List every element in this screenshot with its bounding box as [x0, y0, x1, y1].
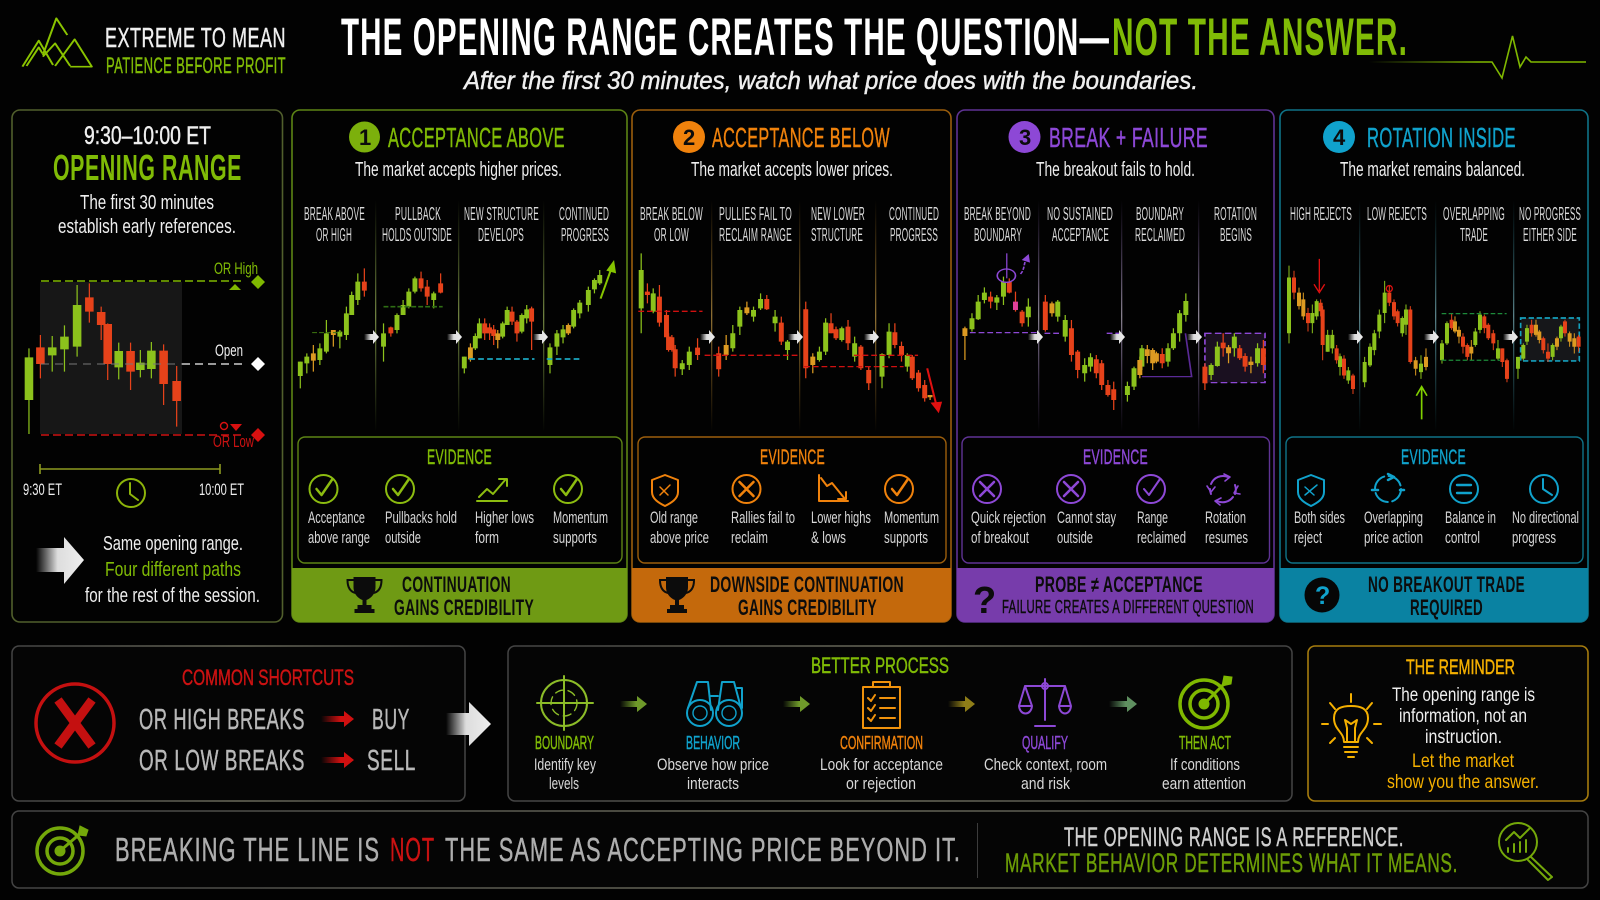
shortcuts heading: COMMON SHORTCUTS: [182, 665, 354, 690]
step: then act: earn attention: [1162, 774, 1246, 793]
step labels: RECLAIMED: [1135, 225, 1185, 245]
icon: falling chart: [819, 475, 848, 501]
process heading: BETTER PROCESS: [811, 653, 949, 678]
step labels: BOUNDARY: [974, 225, 1022, 245]
evidence text: [308, 508, 608, 547]
evidence text: Range: [1137, 508, 1168, 527]
arrow: [948, 696, 975, 712]
banner text: GAINS CREDIBILITY: [394, 595, 534, 620]
arrows between steps: [364, 330, 548, 344]
banner: continuation: [292, 568, 627, 622]
panel: acceptance above: CONTINUED: [559, 204, 609, 224]
step labels: LOW REJECTS: [1367, 204, 1427, 224]
subtitle: After the first 30 minutes, watch what price does with the boundaries.: [462, 67, 1198, 95]
heading: ACCEPTANCE ABOVE: [388, 122, 565, 153]
step: boundary: levels: [549, 774, 579, 793]
panel: opening range: [12, 110, 282, 622]
evidence text: supports: [553, 528, 597, 547]
step labels: BOUNDARY: [1136, 204, 1184, 224]
evidence box: [298, 437, 622, 563]
chart: rotation inside: [1289, 259, 1579, 419]
banner text: GAINS CREDIBILITY: [738, 595, 877, 620]
step: then act: [1162, 676, 1246, 793]
evidence text: Acceptance: [308, 508, 365, 527]
step: then act: THEN ACT: [1179, 733, 1231, 753]
opening range heading: OPENING RANGE: [53, 147, 242, 188]
brand name: EXTREME TO MEAN: [105, 22, 286, 53]
heading: BREAK + FAILURE: [1049, 122, 1208, 153]
evidence text: Pullbacks hold: [385, 508, 457, 527]
reminder text: information, not an: [1399, 706, 1527, 727]
step labels: NEW STRUCTURE: [464, 204, 539, 224]
step labels: BEGINS: [1220, 225, 1252, 245]
evidence text: Quick rejection: [971, 508, 1046, 527]
icon: check: [554, 475, 582, 503]
or high marker: [214, 259, 265, 290]
time axis: [40, 464, 220, 474]
icon: target: [37, 826, 88, 874]
step labels: HOLDS OUTSIDE: [382, 225, 452, 245]
logo: mountains: [22, 18, 92, 67]
evidence text: of breakout: [971, 528, 1029, 547]
arrows between steps: [1028, 330, 1202, 344]
banner text: [1002, 572, 1254, 617]
step labels: BREAK BEYOND: [964, 204, 1031, 224]
panel: acceptance above: [292, 110, 627, 622]
time labels: [23, 480, 244, 499]
banner: no breakout trade: [1280, 568, 1588, 622]
step labels: BREAK ABOVE: [304, 204, 365, 224]
open marker: [215, 341, 265, 371]
paths note: Four different paths: [105, 559, 241, 581]
step: confirmation: [820, 682, 943, 793]
time labels: 10:00 ET: [199, 480, 244, 499]
brand name: PATIENCE BEFORE PROFIT: [106, 53, 286, 78]
icon: heartbeat line: [1369, 36, 1586, 78]
step: boundary: Identify key: [534, 755, 596, 774]
number badge 4: [1323, 121, 1355, 153]
panel: acceptance below: [632, 110, 951, 622]
opening range heading: 9:30–10:00 ET: [84, 122, 211, 150]
arrow to four paths: [36, 537, 84, 584]
banner text: FAILURE CREATES A DIFFERENT QUESTION: [1002, 597, 1254, 617]
opening range description: The first 30 minutes: [80, 192, 214, 214]
time labels: 9:30 ET: [23, 480, 62, 499]
heading: ACCEPTANCE BELOW: [712, 122, 890, 153]
reminder heading: THE REMINDER: [1406, 656, 1515, 679]
panel: acceptance below: PROGRESS: [890, 225, 938, 245]
evidence text: reject: [1294, 528, 1322, 547]
step labels: [1290, 204, 1581, 245]
step labels: OR LOW: [654, 225, 689, 245]
main statement: THE SAME AS ACCEPTING PRICE BEYOND IT.: [445, 831, 961, 868]
evidence text: Rotation: [1205, 508, 1246, 527]
step: behavior: interacts: [687, 774, 739, 793]
reminder text: show you the answer.: [1387, 772, 1539, 793]
number badge 3: 3: [1019, 125, 1031, 150]
or low marker: [213, 422, 265, 451]
icon: clock: [117, 479, 145, 507]
shortcut rule: high: BUY: [372, 704, 410, 736]
banner: probe not acceptance: [957, 568, 1274, 622]
opening range description: [58, 192, 236, 238]
icon: binoculars: [687, 682, 742, 726]
evidence text: Balance in: [1445, 508, 1496, 527]
icon: magnifier chart: [1499, 823, 1552, 880]
step: qualify: QUALIFY: [1022, 733, 1068, 753]
arrows between steps: [700, 330, 879, 344]
evidence box: [1286, 437, 1583, 563]
icon: red x: [36, 684, 114, 762]
main statement: NOT: [390, 831, 435, 868]
arrow to better process: [446, 702, 491, 746]
brand name: [105, 22, 286, 78]
evidence text: Both sides: [1294, 508, 1345, 527]
step: behavior: BEHAVIOR: [686, 733, 740, 753]
icon: check: [310, 475, 338, 503]
step labels: PULLIES FAIL TO: [719, 204, 792, 224]
icon: clock: [1530, 475, 1558, 503]
step: confirmation: CONFIRMATION: [840, 733, 923, 753]
description: The breakout fails to hold.: [1036, 159, 1195, 181]
step labels: RECLAIM RANGE: [719, 225, 792, 245]
chart: break and acceptance above: [300, 260, 616, 388]
step labels: NEW LOWER: [811, 204, 865, 224]
icon: rotation: [1372, 474, 1404, 502]
number badge 1: [349, 122, 380, 152]
evidence text: resumes: [1205, 528, 1248, 547]
closing statement: [1005, 822, 1458, 878]
evidence text: Overlapping: [1364, 508, 1423, 527]
shortcut rule: low: OR LOW BREAKS: [139, 745, 305, 777]
step labels: TRADE: [1460, 225, 1488, 245]
step labels: BREAK BELOW: [640, 204, 703, 224]
chart: break and failure: [965, 253, 1265, 410]
step labels: OR HIGH: [316, 225, 352, 245]
arrow: [620, 696, 647, 712]
description: The market accepts lower prices.: [691, 159, 893, 181]
icon: light bulb: [1322, 694, 1381, 757]
evidence text: form: [475, 528, 499, 547]
panel: the reminder: [1308, 646, 1588, 801]
icon: target: [1180, 676, 1232, 728]
reminder text: Let the market: [1412, 751, 1515, 772]
description: The market accepts higher prices.: [355, 159, 562, 181]
step labels: [304, 204, 609, 245]
banner text: CONTINUATION: [402, 572, 511, 597]
panel: break and failure: [957, 110, 1274, 622]
icon: shield: [1298, 475, 1324, 506]
icon: check: [1137, 475, 1165, 503]
reminder text: The opening range is: [1392, 685, 1535, 706]
evidence text: progress: [1512, 528, 1556, 547]
question mark: ?: [973, 580, 996, 622]
icon: clipboard: [863, 682, 900, 728]
banner text: [1368, 572, 1525, 620]
icon: check: [885, 475, 913, 503]
arrows between steps: [1348, 330, 1518, 344]
panel: bottom banner: [12, 811, 1588, 888]
step: confirmation: or rejection: [846, 774, 916, 793]
icon: x circle: [732, 475, 760, 503]
banner text: [710, 572, 904, 620]
icon: rotation: [1207, 474, 1240, 505]
main statement: [115, 831, 961, 868]
panel: acceptance above: PROGRESS: [561, 225, 609, 245]
evidence text: outside: [385, 528, 421, 547]
evidence heading: EVIDENCE: [1401, 446, 1466, 469]
evidence text: [1294, 508, 1579, 547]
banner text: [394, 572, 534, 620]
icon: shield: [652, 475, 678, 506]
opening range description: establish early references.: [58, 216, 236, 238]
icon: equals circle: [1450, 475, 1478, 503]
paths note: Same opening range.: [103, 533, 243, 555]
banner text: REQUIRED: [1410, 595, 1483, 620]
evidence heading: EVIDENCE: [427, 446, 492, 469]
evidence text: Lower highs: [811, 508, 871, 527]
or high marker: OR High: [214, 259, 258, 278]
evidence text: reclaimed: [1137, 528, 1186, 547]
arrow: [783, 696, 810, 712]
step: behavior: [657, 682, 769, 793]
open marker: Open: [215, 341, 243, 360]
icon: trophy: [348, 577, 382, 613]
evidence text: control: [1445, 528, 1480, 547]
step labels: PULLBACK: [395, 204, 441, 224]
number badge 3: [1008, 121, 1040, 153]
step labels: OVERLAPPING: [1443, 204, 1505, 224]
evidence text: above range: [308, 528, 370, 547]
chart: opening range candles: [29, 281, 245, 435]
step labels: NO SUSTAINED: [1047, 204, 1113, 224]
evidence heading: EVIDENCE: [760, 446, 825, 469]
evidence text: price action: [1364, 528, 1423, 547]
paths note: [85, 533, 260, 607]
reminder text: [1387, 685, 1539, 793]
number badge 4: 4: [1333, 125, 1346, 150]
step: qualify: and risk: [1021, 774, 1070, 793]
banner: downside continuation: [632, 568, 951, 622]
step labels: STRUCTURE: [811, 225, 863, 245]
evidence text: [650, 508, 939, 547]
evidence text: supports: [884, 528, 928, 547]
icon: x circle: [1057, 475, 1085, 503]
icon: question circle: [1304, 578, 1340, 612]
step labels: [640, 204, 939, 245]
evidence box: [638, 437, 946, 563]
number badge 2: 2: [683, 125, 695, 150]
evidence box: [962, 437, 1270, 563]
step: qualify: [984, 679, 1107, 793]
panel: common shortcuts: [12, 646, 465, 801]
reminder text: instruction.: [1425, 727, 1502, 748]
shortcut rule: low: SELL: [367, 745, 416, 777]
icon: crosshair: [537, 676, 593, 730]
opening range heading: [53, 122, 242, 188]
arrow: [1109, 696, 1137, 712]
banner text: DOWNSIDE CONTINUATION: [710, 572, 904, 597]
number badge 2: [673, 121, 705, 153]
icon: trophy: [660, 577, 694, 613]
evidence text: Old range: [650, 508, 698, 527]
panel: acceptance below: CONTINUED: [889, 204, 939, 224]
evidence text: [971, 508, 1248, 547]
step labels: DEVELOPS: [478, 225, 524, 245]
icon: rising chart: [477, 479, 507, 501]
number badge 1: 1: [359, 125, 371, 150]
evidence text: Cannot stay: [1057, 508, 1116, 527]
step: then act: If conditions: [1170, 755, 1240, 774]
or low marker: OR Low: [213, 432, 254, 451]
step labels: HIGH REJECTS: [1290, 204, 1352, 224]
step: behavior: Observe how price: [657, 755, 769, 774]
main statement: BREAKING THE LINE IS: [115, 831, 380, 868]
step labels: [964, 204, 1257, 245]
evidence text: reclaim: [731, 528, 768, 547]
shortcut rule: high: OR HIGH BREAKS: [139, 704, 305, 736]
banner text: PROBE ≠ ACCEPTANCE: [1035, 572, 1203, 597]
icon: scales: [1019, 679, 1071, 726]
evidence text: Rallies fail to: [731, 508, 795, 527]
icon: x circle: [973, 475, 1001, 503]
chart: break and acceptance below: [638, 253, 942, 413]
evidence text: Momentum: [553, 508, 608, 527]
icon: question circle: ?: [1315, 582, 1330, 610]
step: qualify: Check context, room: [984, 755, 1107, 774]
step: confirmation: Look for acceptance: [820, 755, 943, 774]
evidence text: & lows: [811, 528, 846, 547]
step labels: ACCEPTANCE: [1052, 225, 1109, 245]
panel: rotation inside: [1280, 110, 1588, 622]
evidence heading: EVIDENCE: [1083, 446, 1148, 469]
evidence text: Momentum: [884, 508, 939, 527]
panel: break and failure: ROTATION: [1214, 204, 1257, 224]
evidence text: outside: [1057, 528, 1093, 547]
step: boundary: BOUNDARY: [535, 733, 594, 753]
icon: check: [386, 475, 414, 503]
panel: better process: [508, 646, 1292, 801]
evidence text: Higher lows: [475, 508, 534, 527]
step: boundary: [534, 676, 596, 793]
evidence text: above price: [650, 528, 709, 547]
paths note: for the rest of the session.: [85, 585, 260, 607]
